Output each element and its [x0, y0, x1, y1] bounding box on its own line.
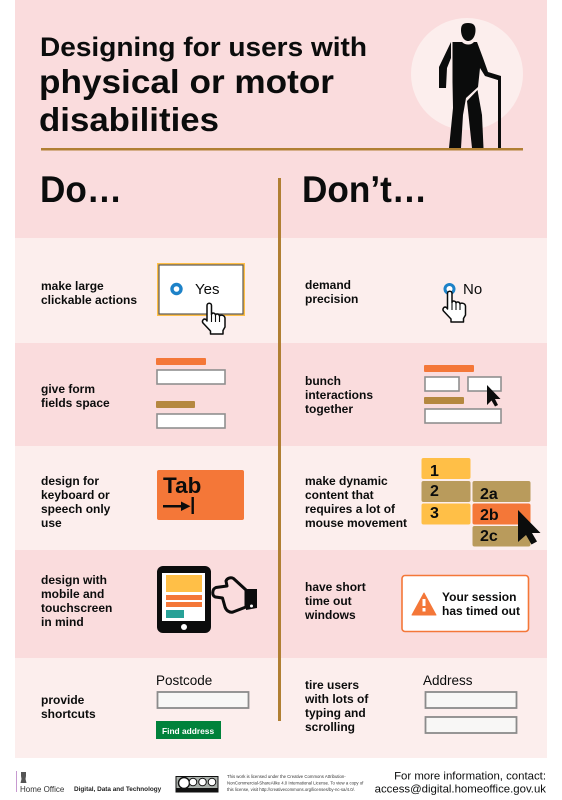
label: typing and — [305, 706, 366, 720]
icon: tablet — [157, 566, 211, 633]
postcode field — [156, 673, 248, 708]
label: precision — [305, 292, 358, 306]
small radio button — [445, 281, 482, 298]
label: keyboard or — [41, 488, 110, 502]
creative commons badge — [176, 776, 218, 792]
label: fields space — [41, 396, 110, 410]
label: with lots of — [304, 692, 369, 706]
label: in mind — [41, 615, 84, 629]
label: have short — [305, 580, 366, 594]
large radio button: Yes — [195, 281, 219, 298]
session timeout alert: Your session — [442, 590, 516, 604]
dont row 1: demand precision — [305, 278, 482, 322]
do row 3: keyboard or speech — [41, 470, 244, 530]
small radio button: No — [463, 281, 482, 298]
label: clickable actions — [41, 293, 137, 307]
label: shortcuts — [41, 707, 96, 721]
dont row 3: dynamic content — [305, 458, 540, 546]
icon: hand cursor — [202, 303, 225, 334]
icon: arrow cursor — [487, 385, 500, 406]
label: use — [41, 516, 62, 530]
flyout menu: 2c — [480, 528, 498, 545]
heading: Do: Do… — [40, 169, 122, 210]
label: make large — [41, 279, 104, 293]
icon: tab key — [157, 470, 244, 520]
find address button: Find address — [162, 726, 214, 736]
header rule — [41, 148, 523, 150]
find address button — [156, 721, 221, 739]
flyout menu: 2a — [480, 486, 498, 503]
licence text: NonCommercial-ShareAlike 4.0 International License. To view a copy of — [227, 780, 364, 786]
label: mouse movement — [305, 516, 407, 530]
label: together — [305, 402, 353, 416]
label: windows — [304, 608, 356, 622]
label: interactions — [305, 388, 373, 402]
label: speech only — [41, 502, 111, 516]
do row 5: shortcuts — [41, 673, 248, 739]
dont row 5: typing and scrolling — [304, 673, 516, 734]
icon: pointing hand — [213, 578, 257, 612]
large radio button — [157, 263, 245, 316]
label: content that — [305, 488, 374, 502]
title: disabilities — [39, 102, 219, 139]
flyout menu: 3 — [430, 505, 439, 522]
title — [39, 32, 367, 139]
flyout menu: 2b — [480, 507, 499, 524]
label: design with — [41, 573, 107, 587]
home office logo — [16, 771, 65, 794]
icon: arrow cursor — [518, 510, 540, 544]
contact: For more information, contact: — [394, 770, 546, 782]
icon: tab key: Tab — [163, 473, 201, 498]
dont row 4: short time out — [304, 576, 528, 632]
icon: person walking with a cane — [411, 18, 523, 148]
home office logo: Home Office — [20, 785, 65, 794]
session timeout alert — [402, 576, 528, 632]
label: demand — [305, 278, 351, 292]
label: provide — [41, 693, 84, 707]
title: Designing for users with — [40, 32, 367, 62]
flyout menu — [422, 458, 530, 546]
spaced form — [156, 358, 225, 428]
do row 1: large clickable actions — [41, 263, 245, 334]
title: physical or motor — [39, 64, 334, 101]
do row 2: form fields with space — [41, 358, 225, 428]
flyout menu: 1 — [430, 463, 439, 480]
footer — [16, 770, 546, 796]
label: mobile and — [41, 587, 104, 601]
address fields: Address — [423, 673, 473, 688]
flyout menu: 2 — [430, 483, 439, 500]
label: make dynamic — [305, 474, 388, 488]
label: tire users — [305, 678, 359, 692]
label: touchscreen — [41, 601, 112, 615]
centre divider — [278, 178, 281, 721]
label: give form — [41, 382, 95, 396]
label: time out — [305, 594, 352, 608]
dont row 2: bunched interactions — [305, 365, 501, 423]
do row 4: mobile and touchscreen — [41, 566, 257, 633]
label: scrolling — [305, 720, 355, 734]
heading: Don't: Don’t… — [302, 169, 427, 210]
session timeout alert: has timed out — [442, 604, 520, 618]
label: requires a lot of — [305, 502, 396, 516]
contact: access@digital.homeoffice.gov.uk — [375, 784, 546, 796]
licence text: This work is licensed under the Creative Commons Attribution- — [227, 774, 346, 779]
label: design for — [41, 474, 99, 488]
digital data and technology: Digital, Data and Technology — [74, 786, 162, 793]
postcode field: Postcode — [156, 673, 212, 688]
bunched form — [424, 365, 501, 423]
address fields — [423, 673, 516, 733]
icon: hand cursor — [443, 291, 466, 322]
label: bunch — [305, 374, 341, 388]
licence text: this license, visit http://creativecommons.org/licenses/by-nc-sa/4.0/. — [227, 787, 355, 792]
